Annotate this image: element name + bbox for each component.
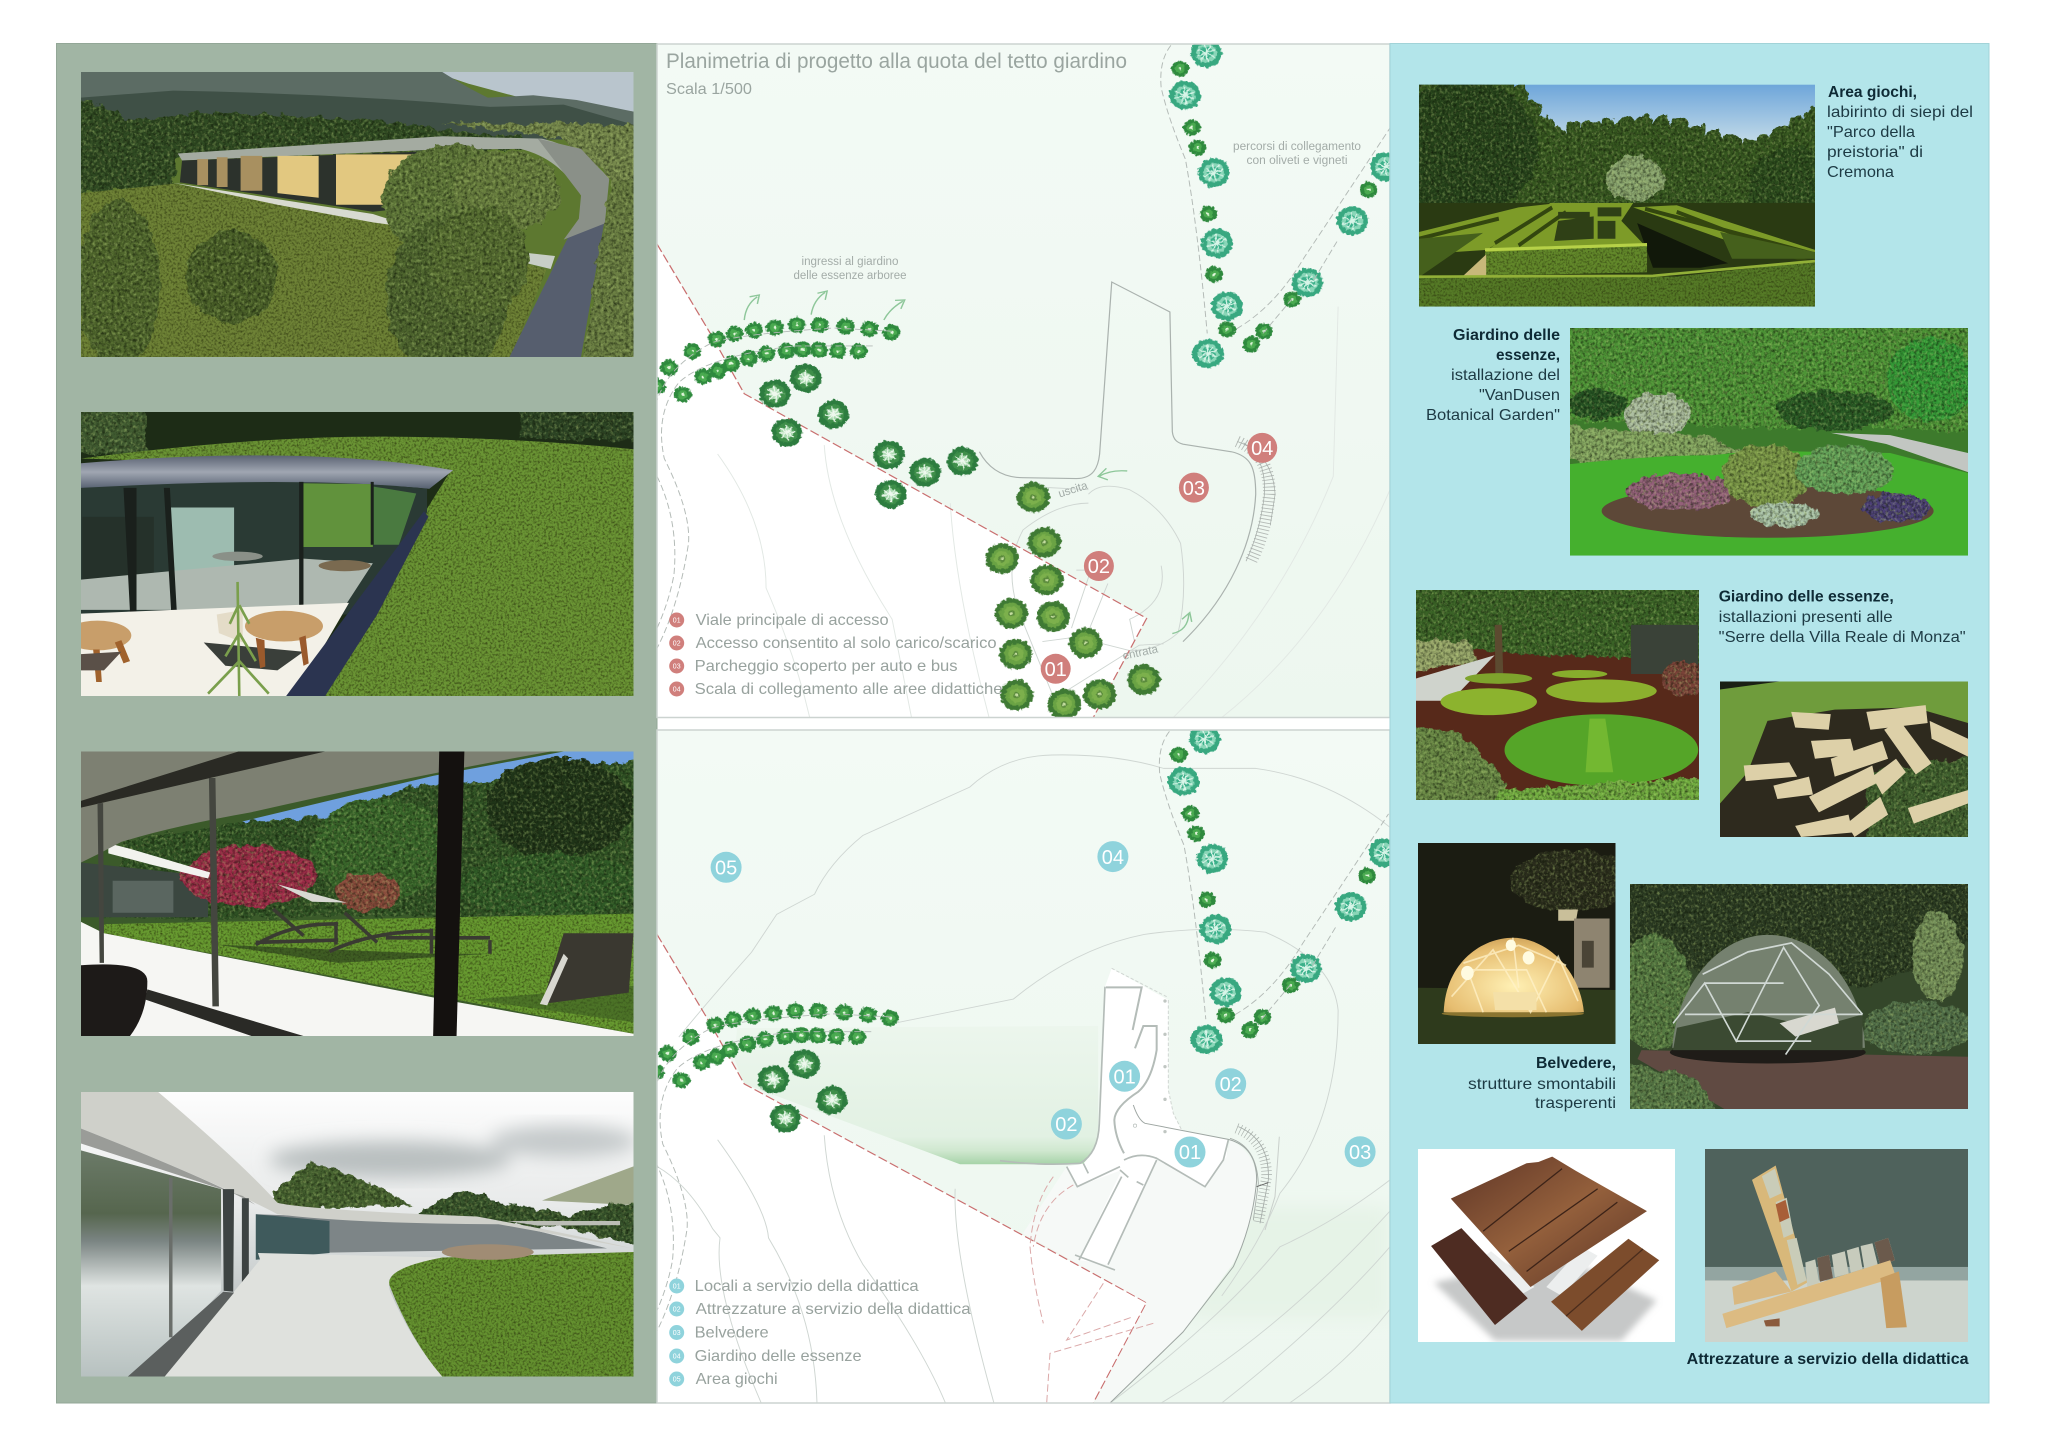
caption: area giochi: "Parco della	[1827, 124, 1915, 141]
numbered markers: aqua: 02	[1220, 1074, 1242, 1096]
panel: left building photographs	[43, 44, 659, 1403]
caption: area giochi: Area giochi,	[1828, 84, 1917, 101]
photo: hedge maze	[1419, 84, 1815, 307]
numbered markers: red: 01	[1045, 659, 1067, 681]
caption: Monza greenhouses: "Serre della Villa Reale di Monza"	[1719, 629, 1966, 646]
trees: rows along entrance and paths	[648, 727, 1397, 1334]
legend: teaching facilities and gardens: 03	[673, 1330, 681, 1337]
numbered markers: aqua: 01	[1113, 1066, 1136, 1088]
photo: long concrete canopy and white path	[81, 1092, 634, 1376]
note: garden entrances	[794, 256, 906, 282]
note: connecting paths: percorsi di collegamento	[1233, 141, 1361, 153]
numbered markers: aqua: 03	[1349, 1142, 1371, 1164]
plan drawing: teaching areas and gardens	[658, 730, 1390, 1402]
legend: access and parking	[669, 612, 1003, 698]
numbered markers: red: 02	[1088, 556, 1110, 578]
caption: area giochi: Cremona	[1827, 164, 1894, 181]
caption: VanDusen garden: "VanDusen	[1479, 387, 1560, 404]
legend: access and parking: Scala di collegamento alle aree didattiche	[695, 681, 1003, 698]
plan title: Planimetria di progetto alla quota del tetto giardino	[666, 50, 1127, 73]
legend: teaching facilities and gardens: 04	[673, 1354, 681, 1360]
caption: belvedere	[1468, 1055, 1616, 1112]
note: connecting paths: con oliveti e vigneti	[1246, 155, 1348, 167]
caption: Monza greenhouses: Giardino delle essenze,	[1719, 589, 1894, 606]
legend: teaching facilities and gardens: Giardino delle essenze	[695, 1348, 862, 1365]
building plan: teaching rooms, stairs and access corridor	[1000, 968, 1279, 1403]
note: garden entrances: ingressi al giardino	[802, 256, 898, 268]
entry and exit arrows	[744, 291, 1192, 634]
numbered markers: red	[1041, 433, 1277, 684]
photo: VanDusen circular flower bed	[1570, 328, 1968, 556]
caption: Monza greenhouses: istallazioni presenti alle	[1719, 609, 1893, 626]
legend: teaching facilities and gardens: 05	[673, 1376, 681, 1384]
legend: access and parking: 01	[673, 618, 681, 624]
legend: access and parking: 04	[673, 686, 681, 694]
legend: teaching facilities and gardens: 01	[673, 1284, 681, 1290]
label: exit: uscita	[1057, 480, 1090, 500]
caption: area giochi	[1827, 84, 1973, 181]
legend: access and parking: Viale principale di accesso	[696, 612, 889, 629]
photo: terrace under curved roof with lawn	[81, 412, 634, 696]
caption: VanDusen garden: Botanical Garden"	[1426, 407, 1560, 424]
note: garden entrances: delle essenze arboree	[794, 270, 906, 282]
legend: access and parking: Parcheggio scoperto per auto e bus	[695, 658, 958, 675]
trees: green and olive groups	[876, 443, 1158, 717]
photo: Monza garden with circular lawns	[1416, 590, 1699, 800]
photo: view through glazing onto lawn and loungers	[81, 752, 634, 1036]
caption: area giochi: preistoria" di	[1827, 144, 1923, 161]
caption: belvedere: trasperenti	[1535, 1095, 1616, 1112]
panel: upper site plan	[650, 41, 1399, 718]
numbered markers: aqua: 02	[1055, 1114, 1078, 1136]
caption: VanDusen garden: Giardino delle	[1453, 327, 1560, 344]
panel: lower site plan	[648, 727, 1397, 1403]
plan scale: Scala 1/500	[666, 81, 752, 98]
photo: transparent dome in garden	[1630, 884, 1968, 1109]
caption: belvedere: strutture smontabili	[1468, 1076, 1616, 1093]
legend: access and parking: Accesso consentito al solo carico/scarico	[696, 635, 997, 652]
panel: right references	[1388, 44, 1989, 1403]
legend: teaching facilities and gardens	[669, 1278, 971, 1388]
caption: equipment: Attrezzature a servizio della didattica	[1687, 1351, 1969, 1368]
legend: teaching facilities and gardens: Attrezzature a servizio della didattica	[696, 1301, 971, 1318]
numbered markers: aqua: 01	[1179, 1142, 1201, 1164]
legend: teaching facilities and gardens: 02	[673, 1306, 681, 1314]
note: connecting paths	[1233, 141, 1361, 167]
plan drawing: roof garden level with trees and access	[658, 44, 1390, 717]
numbered markers: red: 04	[1251, 438, 1273, 460]
caption: VanDusen garden: essenze,	[1496, 347, 1560, 364]
photo: wooden picnic table	[1418, 1149, 1675, 1342]
legend: teaching facilities and gardens: Area giochi	[696, 1371, 778, 1388]
caption: area giochi: labirinto di siepi del	[1827, 104, 1973, 121]
numbered markers: aqua: 04	[1102, 847, 1124, 869]
legend: teaching facilities and gardens: Belvedere	[695, 1324, 769, 1342]
trees: rows along entrance and paths	[650, 41, 1399, 648]
caption: VanDusen garden: istallazione del	[1451, 367, 1560, 384]
legend: access and parking: 03	[673, 664, 681, 670]
label: entrance: entrata	[1122, 643, 1160, 663]
caption: Monza greenhouses	[1719, 589, 1966, 646]
caption: VanDusen garden	[1426, 327, 1560, 424]
numbered markers: red: 03	[1183, 478, 1205, 500]
photo: curved green-roof building with mountains	[81, 72, 634, 357]
photo: illuminated geodesic dome at night	[1418, 843, 1616, 1044]
photo: pallet lounge chair	[1705, 1149, 1968, 1342]
numbered markers: aqua: 05	[715, 858, 737, 880]
legend: teaching facilities and gardens: Locali a servizio della didattica	[695, 1278, 919, 1295]
numbered markers: aqua	[711, 841, 1376, 1168]
legend: access and parking: 02	[673, 640, 681, 648]
caption: belvedere: Belvedere,	[1536, 1055, 1616, 1072]
photo: wooden star planters	[1720, 682, 1968, 837]
